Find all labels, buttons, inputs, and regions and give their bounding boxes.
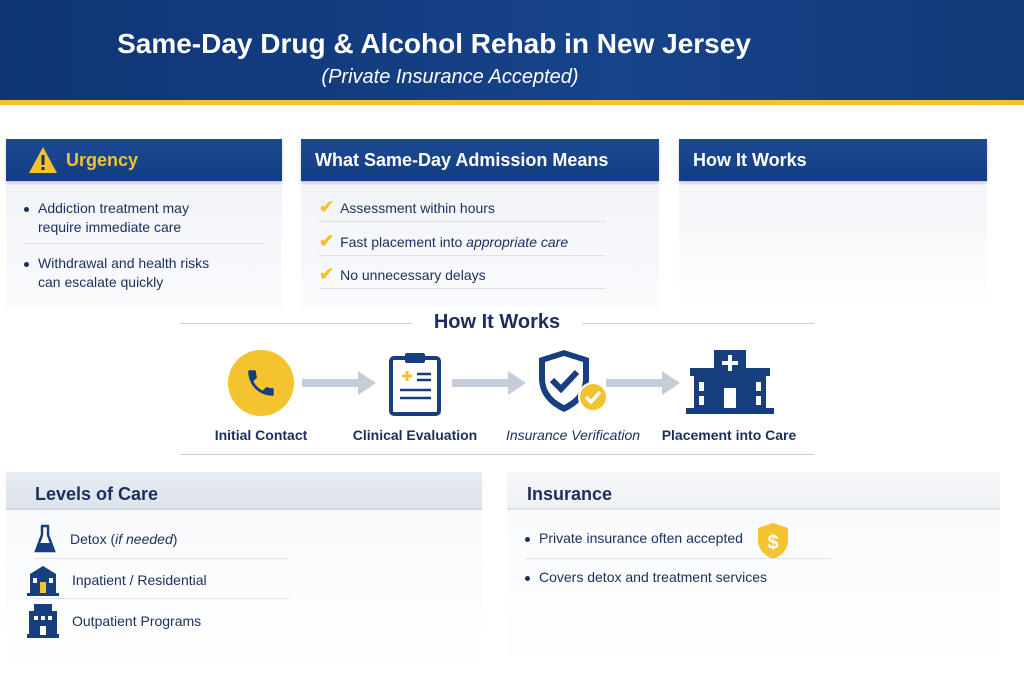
- insurance heading: Insurance: [527, 484, 612, 504]
- item: detox: Detox (if needed): [70, 531, 177, 547]
- icon: shield check: [539, 350, 606, 412]
- urgency heading: Urgency: [66, 150, 138, 170]
- insurance bullet 2: Covers detox and treatment services: [539, 569, 767, 585]
- label: insurance verification: Insurance Verification: [506, 427, 640, 443]
- urgency bullet 1: Addiction treatment may: [38, 200, 189, 216]
- check item 3: ✔ No unnecessary delays: [319, 264, 486, 284]
- levels heading: [6, 472, 482, 510]
- urgency bullet 1: require immediate care: [38, 219, 181, 235]
- urgency bullet 1: [24, 200, 189, 235]
- icon: hospital: [686, 350, 774, 414]
- arrow 3: [606, 371, 680, 395]
- icon: phone: [228, 350, 294, 416]
- how it works heading: How It Works: [693, 150, 807, 170]
- label: clinical evaluation: Clinical Evaluation: [353, 427, 477, 443]
- urgency bullet 2: [24, 255, 209, 290]
- arrow 1: [302, 371, 376, 395]
- header banner: [0, 0, 1024, 105]
- process title: How It Works: [434, 311, 560, 333]
- check item 1: ✔ Assessment within hours: [319, 197, 495, 217]
- section: how it works process: [180, 311, 814, 455]
- item: detox: [34, 524, 177, 552]
- insurance heading: [507, 472, 1000, 510]
- icon: shield dollar: $: [767, 532, 779, 554]
- insurance bullet 1: Private insurance often accepted: [539, 530, 743, 546]
- icon: shield dollar: [758, 523, 788, 558]
- how it works heading: [679, 139, 987, 181]
- urgency heading: [6, 139, 282, 181]
- subtitle: (Private Insurance Accepted): [321, 66, 579, 88]
- item: outpatient: Outpatient Programs: [72, 613, 201, 629]
- panel: same-day admission: [301, 139, 659, 309]
- urgency bullet 2: Withdrawal and health risks: [38, 255, 209, 271]
- levels heading: Levels of Care: [35, 484, 158, 504]
- urgency bullet 2: can escalate quickly: [38, 274, 163, 290]
- check item 2: ✔ Fast placement into appropriate care: [319, 231, 568, 251]
- same-day heading: [301, 139, 659, 181]
- label: placement into care: Placement into Care: [662, 427, 796, 443]
- same-day heading: What Same-Day Admission Means: [315, 150, 608, 170]
- panel: levels of care: [6, 472, 482, 672]
- panel: insurance: [507, 472, 1000, 672]
- item: outpatient: [27, 604, 201, 638]
- item: inpatient: [27, 566, 207, 596]
- title: Same-Day Drug & Alcohol Rehab in New Jersey: [117, 28, 751, 59]
- item: inpatient: Inpatient / Residential: [72, 572, 207, 588]
- arrow 2: [452, 371, 526, 395]
- icon: clipboard: [389, 353, 441, 416]
- label: initial contact: Initial Contact: [215, 427, 307, 443]
- panel: how it works top: [679, 139, 987, 309]
- panel: urgency: [6, 139, 282, 309]
